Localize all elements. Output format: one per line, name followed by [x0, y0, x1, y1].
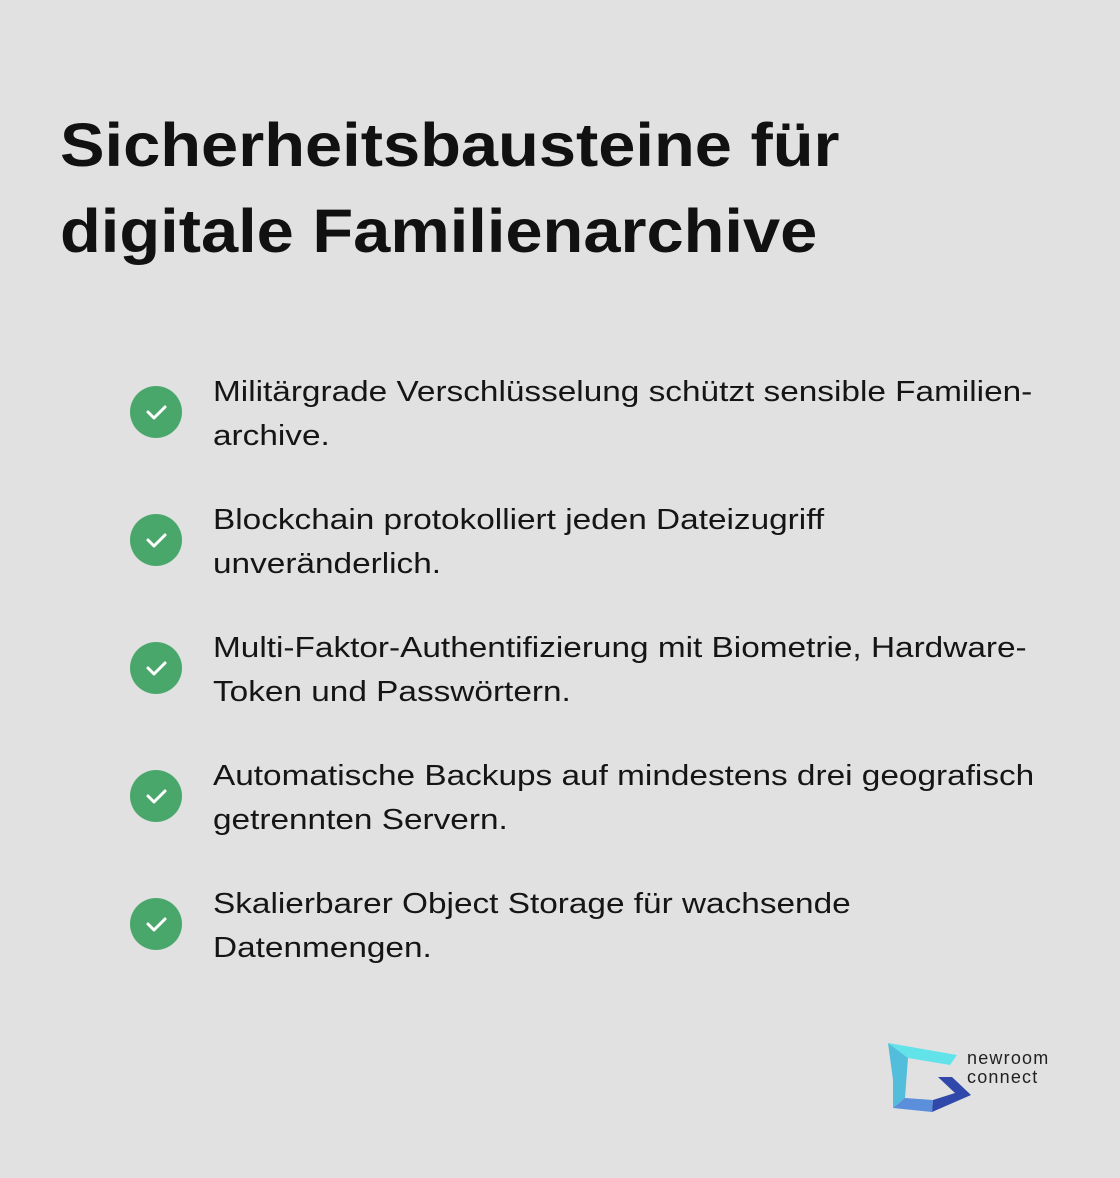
title: digitale Familienarchive — [60, 197, 817, 265]
text 4: Automatische Backups auf mindestens drei geografisch — [213, 760, 1034, 792]
text 3 — [213, 632, 1027, 708]
logo: connect — [967, 1067, 1038, 1087]
icon: check — [130, 898, 182, 950]
text 3: Token und Passwörtern. — [213, 676, 571, 708]
icon: check — [130, 770, 182, 822]
text 2: Blockchain protokolliert jeden Dateizugriff — [213, 504, 824, 536]
title — [60, 111, 840, 265]
icon: check — [130, 386, 182, 438]
item 2 — [130, 504, 824, 580]
text 2 — [213, 504, 824, 580]
item 3 — [130, 632, 1027, 708]
text 5 — [213, 888, 851, 964]
item 4 — [130, 760, 1034, 836]
title: Sicherheitsbausteine für — [60, 111, 840, 179]
item 1 — [130, 376, 1032, 452]
text 5: Datenmengen. — [213, 932, 432, 964]
text 5: Skalierbarer Object Storage für wachsende — [213, 888, 851, 920]
text 1 — [213, 376, 1032, 452]
logo — [888, 1043, 1049, 1112]
icon: check — [130, 642, 182, 694]
text 4: getrennten Servern. — [213, 804, 508, 836]
icon: check — [130, 514, 182, 566]
text 1: Militärgrade Verschlüsselung schützt sensible Familien- — [213, 376, 1032, 408]
text 3: Multi-Faktor-Authentifizierung mit Biometrie, Hardware- — [213, 632, 1027, 664]
text 1: archive. — [213, 420, 330, 452]
item 5 — [130, 888, 851, 964]
text 4 — [213, 760, 1034, 836]
logo: newroom — [967, 1048, 1049, 1068]
text 2: unveränderlich. — [213, 548, 441, 580]
